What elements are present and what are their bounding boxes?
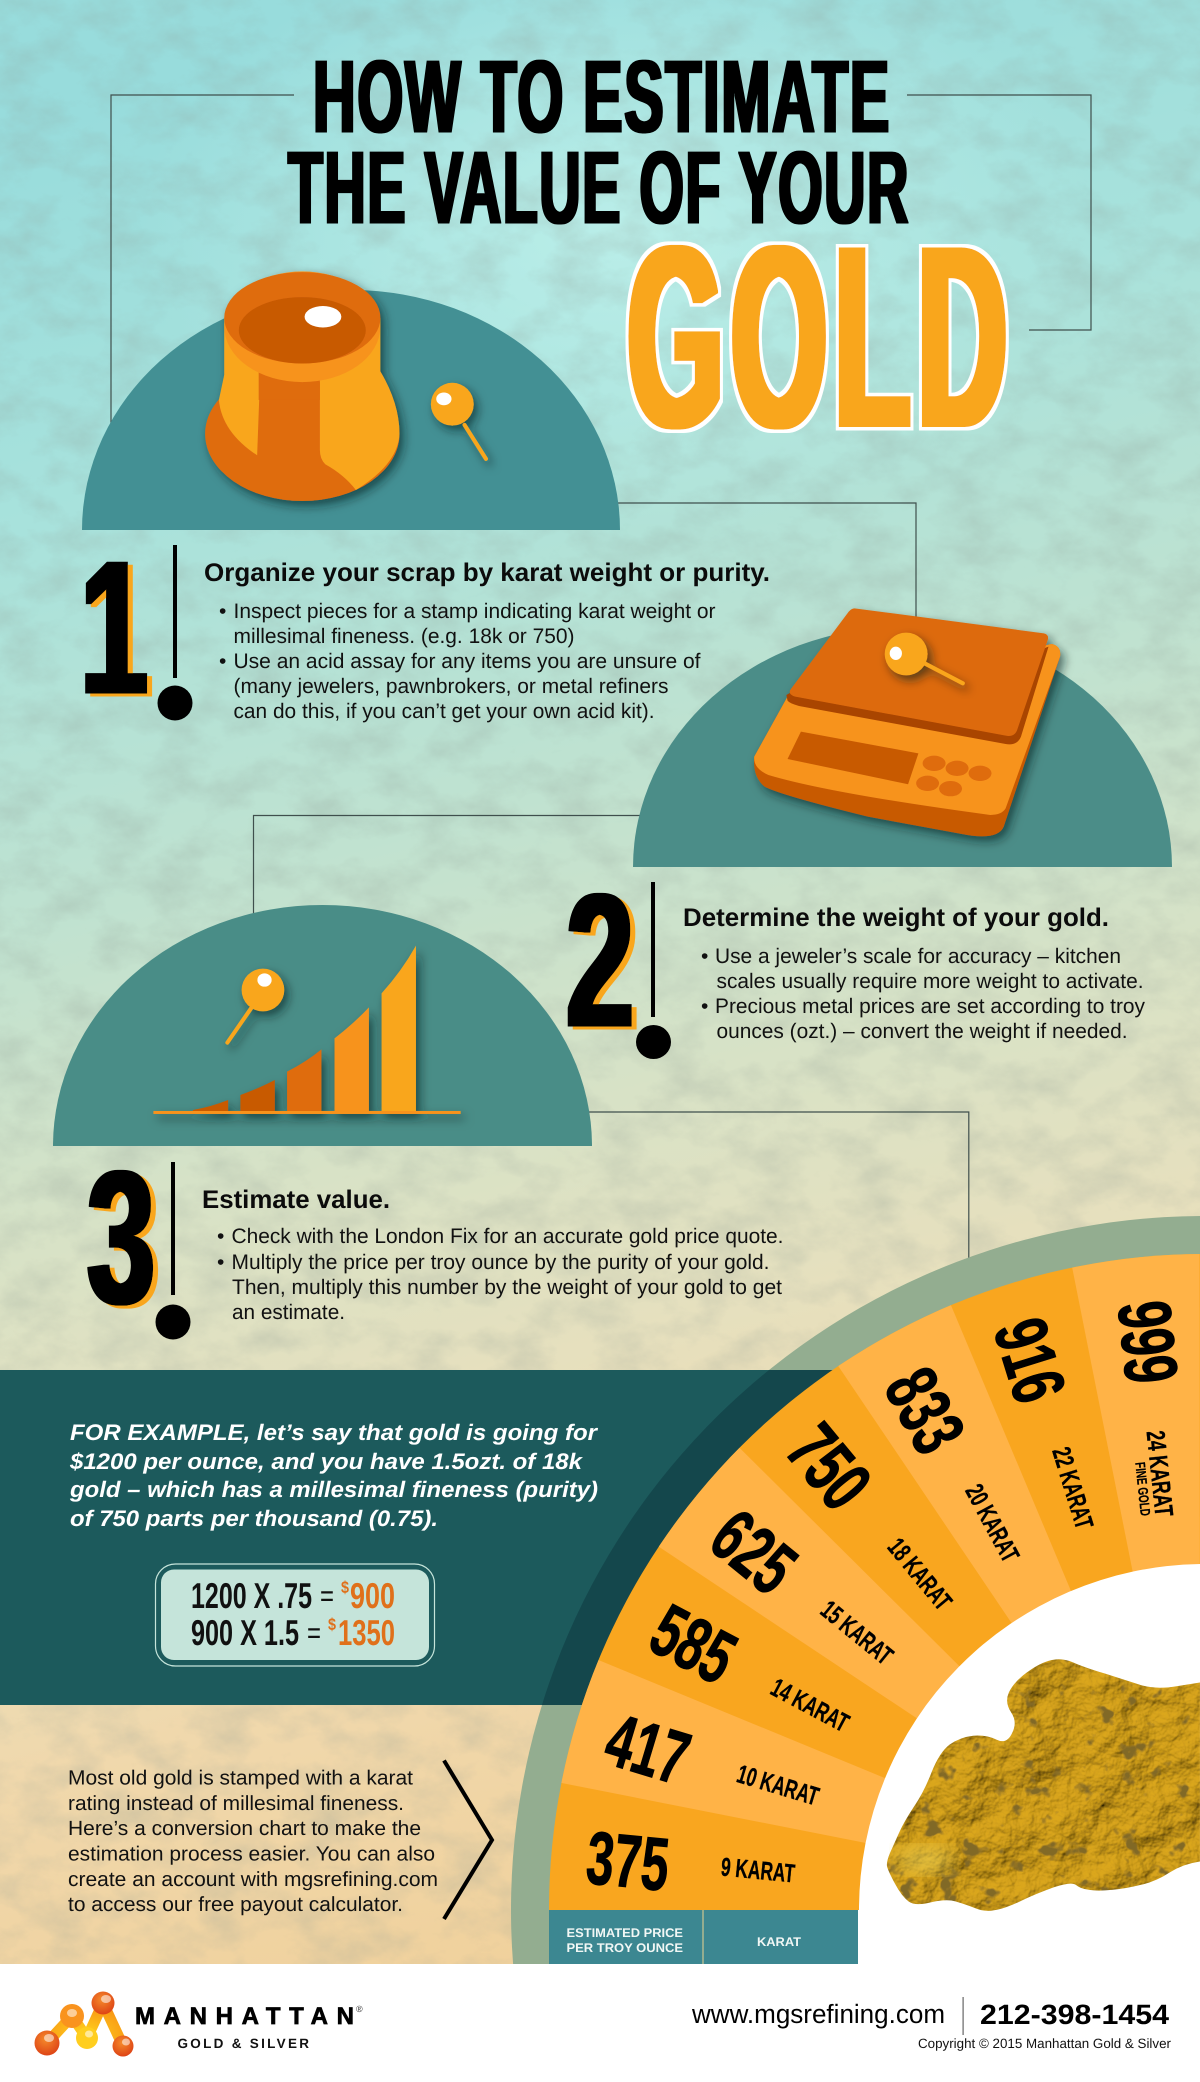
title xyxy=(288,39,910,245)
bullets: Then, multiply this number by the weight of your gold to get xyxy=(232,1276,782,1299)
semicircle 3 with bar chart xyxy=(53,905,592,1146)
dial wedges xyxy=(549,1254,1200,1910)
row: 916 / 22 karat: 22 KARAT xyxy=(1046,1443,1100,1533)
exclamation bar and dot xyxy=(156,1162,190,1340)
row: 750 / 18 karat: 18 KARAT xyxy=(882,1532,958,1616)
conversion paragraph: Here’s a conversion chart to make the xyxy=(68,1817,421,1840)
example band xyxy=(0,1370,1000,1705)
bullets: (many jewelers, pawnbrokers, or metal refiners xyxy=(234,675,668,698)
row: 833 / 20 karat: 20 KARAT xyxy=(959,1479,1026,1567)
ring over the band xyxy=(542,1370,832,1705)
semicircle 1 with ring icon xyxy=(82,271,620,530)
legend: karat: KARAT xyxy=(757,1935,801,1949)
equation line 2: 1350 xyxy=(338,1612,395,1653)
row: 999 / 24 karat fine gold: FINE GOLD xyxy=(1132,1461,1154,1517)
icon: gold pin xyxy=(431,383,486,459)
conversion paragraph xyxy=(68,1766,438,1916)
icon: gold pin on scale xyxy=(885,633,963,683)
bullets: • xyxy=(219,650,226,673)
arrow chevron xyxy=(444,1760,492,1919)
heading: Determine the weight of your gold. xyxy=(683,904,1109,932)
heading: Estimate value. xyxy=(202,1186,390,1214)
logo wordmark: MANHATTAN xyxy=(135,2003,354,2030)
bullets xyxy=(701,945,1145,1043)
conversion paragraph: estimation process easier. You can also xyxy=(68,1842,435,1866)
bullets: • xyxy=(217,1225,224,1248)
connector: step 3 to chart dial xyxy=(585,1112,969,1260)
example text: gold – which has a millesimal fineness (purity) xyxy=(69,1477,598,1502)
row: 833 / 20 karat xyxy=(869,1354,1026,1567)
exclamation bar and dot xyxy=(158,545,192,720)
semicircle 2 with scale icon xyxy=(633,608,1172,867)
numeral 3: 3 xyxy=(87,1132,155,1344)
icon: jeweler's scale xyxy=(754,608,1060,836)
row: 833 / 20 karat: 833 xyxy=(869,1354,982,1467)
footer contact: 212-398-1454 xyxy=(980,1999,1169,2030)
step 1 xyxy=(80,522,770,734)
footer contact xyxy=(691,1997,1171,2051)
bullets: Use a jeweler’s scale for accuracy – kitchen xyxy=(715,945,1121,968)
bullets xyxy=(217,1225,784,1324)
bullets: Check with the London Fix for an accurate gold price quote. xyxy=(232,1225,784,1248)
row: 916 / 22 karat: 916 xyxy=(978,1309,1082,1412)
legend: estimated price: ESTIMATED PRICE xyxy=(566,1926,683,1940)
row: 375 / 9 karat: 9 KARAT xyxy=(720,1851,796,1889)
example text: FOR EXAMPLE, let’s say that gold is going for xyxy=(70,1420,598,1445)
example text xyxy=(69,1420,598,1531)
bullets: Use an acid assay for any items you are unsure of xyxy=(234,650,701,673)
equation box xyxy=(156,1564,434,1666)
numeral 1: 1 xyxy=(80,522,148,734)
conversion paragraph: create an account with mgsrefining.com xyxy=(68,1868,438,1891)
logo wordmark: GOLD & SILVER xyxy=(178,2036,309,2051)
connector: step 2 to chart xyxy=(254,816,646,915)
logo: Manhattan Gold & Silver xyxy=(34,1992,363,2056)
exclamation bar and dot xyxy=(636,882,671,1059)
row: 585 / 14 karat: 14 KARAT xyxy=(766,1672,854,1738)
row: 375 / 9 karat xyxy=(583,1815,796,1907)
nugget highlight xyxy=(895,1846,955,1874)
legend: estimated price: PER TROY OUNCE xyxy=(566,1941,683,1955)
connector: step 1 to scale xyxy=(616,503,916,620)
equation line 1: $ xyxy=(341,1578,349,1597)
row: 916 / 22 karat xyxy=(978,1309,1100,1533)
equation line 2: $ xyxy=(328,1615,336,1634)
row: 999 / 24 karat fine gold xyxy=(1102,1297,1194,1518)
logo wordmark: ® xyxy=(356,2004,363,2014)
row: 750 / 18 karat xyxy=(771,1408,958,1616)
row: 417 / 10 karat: 10 KARAT xyxy=(733,1759,823,1812)
footer contact: Copyright © 2015 Manhattan Gold & Silver xyxy=(918,2036,1171,2051)
row: 625 / 15 karat: 15 KARAT xyxy=(815,1594,899,1671)
bullets xyxy=(219,600,716,723)
conversion paragraph: rating instead of millesimal fineness. xyxy=(68,1792,404,1815)
bullets: millesimal fineness. (e.g. 18k or 750) xyxy=(234,625,574,648)
title connector bracket xyxy=(111,95,1091,436)
bullets: an estimate. xyxy=(232,1301,345,1324)
example text: of 750 parts per thousand (0.75). xyxy=(70,1506,438,1531)
legend: estimated price xyxy=(549,1910,702,1965)
footer white strip xyxy=(0,1964,1200,2082)
bullets: can do this, if you can’t get your own acid kit). xyxy=(234,700,654,723)
logo wordmark xyxy=(135,2003,363,2051)
equation line 1: 1200 X .75 xyxy=(191,1575,312,1616)
step 2 xyxy=(566,855,1145,1067)
karat dial chart xyxy=(549,1254,1200,1964)
row: 999 / 24 karat fine gold: 999 xyxy=(1102,1297,1194,1387)
bullets: Multiply the price per troy ounce by the purity of your gold. xyxy=(232,1251,770,1274)
bullets: scales usually require more weight to activate. xyxy=(716,970,1144,993)
bullets: Inspect pieces for a stamp indicating karat weight or xyxy=(234,600,716,623)
inner white hub xyxy=(858,1564,1200,1970)
icon: gold pin xyxy=(227,969,284,1043)
heading: Organize your scrap by karat weight or purity. xyxy=(204,559,770,587)
equation line 1: = xyxy=(320,1580,334,1613)
icon: gold ring xyxy=(205,271,399,501)
bullets: • xyxy=(701,995,708,1018)
conversion paragraph: to access our free payout calculator. xyxy=(68,1893,403,1916)
numeral 2: 2 xyxy=(566,855,634,1067)
bar chart icon xyxy=(153,946,461,1114)
step 3 xyxy=(87,1132,784,1344)
row: 585 / 14 karat: 585 xyxy=(638,1588,749,1700)
row: 375 / 9 karat: 375 xyxy=(583,1815,673,1907)
example text: $1200 per ounce, and you have 1.5ozt. of 18k xyxy=(69,1449,584,1474)
row: 417 / 10 karat xyxy=(596,1697,823,1812)
footer contact: www.mgsrefining.com xyxy=(691,1999,945,2029)
bullets: ounces (ozt.) – convert the weight if needed. xyxy=(716,1020,1128,1043)
equation line 1: 900 xyxy=(350,1575,395,1616)
bullets: Precious metal prices are set according to troy xyxy=(715,995,1145,1018)
legend: karat xyxy=(704,1910,858,1965)
outer ring behind dial xyxy=(511,1216,1200,1964)
row: 417 / 10 karat: 417 xyxy=(596,1697,699,1801)
row: 625 / 15 karat xyxy=(696,1493,899,1671)
equation line 2: = xyxy=(307,1617,321,1650)
bullets: • xyxy=(701,945,708,968)
bullets: • xyxy=(219,600,226,623)
row: 999 / 24 karat fine gold: 24 KARAT xyxy=(1141,1429,1179,1518)
row: 625 / 15 karat: 625 xyxy=(696,1493,812,1610)
conversion paragraph: Most old gold is stamped with a karat xyxy=(68,1766,413,1790)
row: 750 / 18 karat: 750 xyxy=(771,1408,888,1525)
gold nugget xyxy=(887,1659,1200,1911)
bullets: • xyxy=(217,1251,224,1274)
row: 585 / 14 karat xyxy=(638,1588,854,1738)
logo molecule icon xyxy=(34,1992,134,2056)
equation line 2: 900 X 1.5 xyxy=(191,1612,299,1653)
